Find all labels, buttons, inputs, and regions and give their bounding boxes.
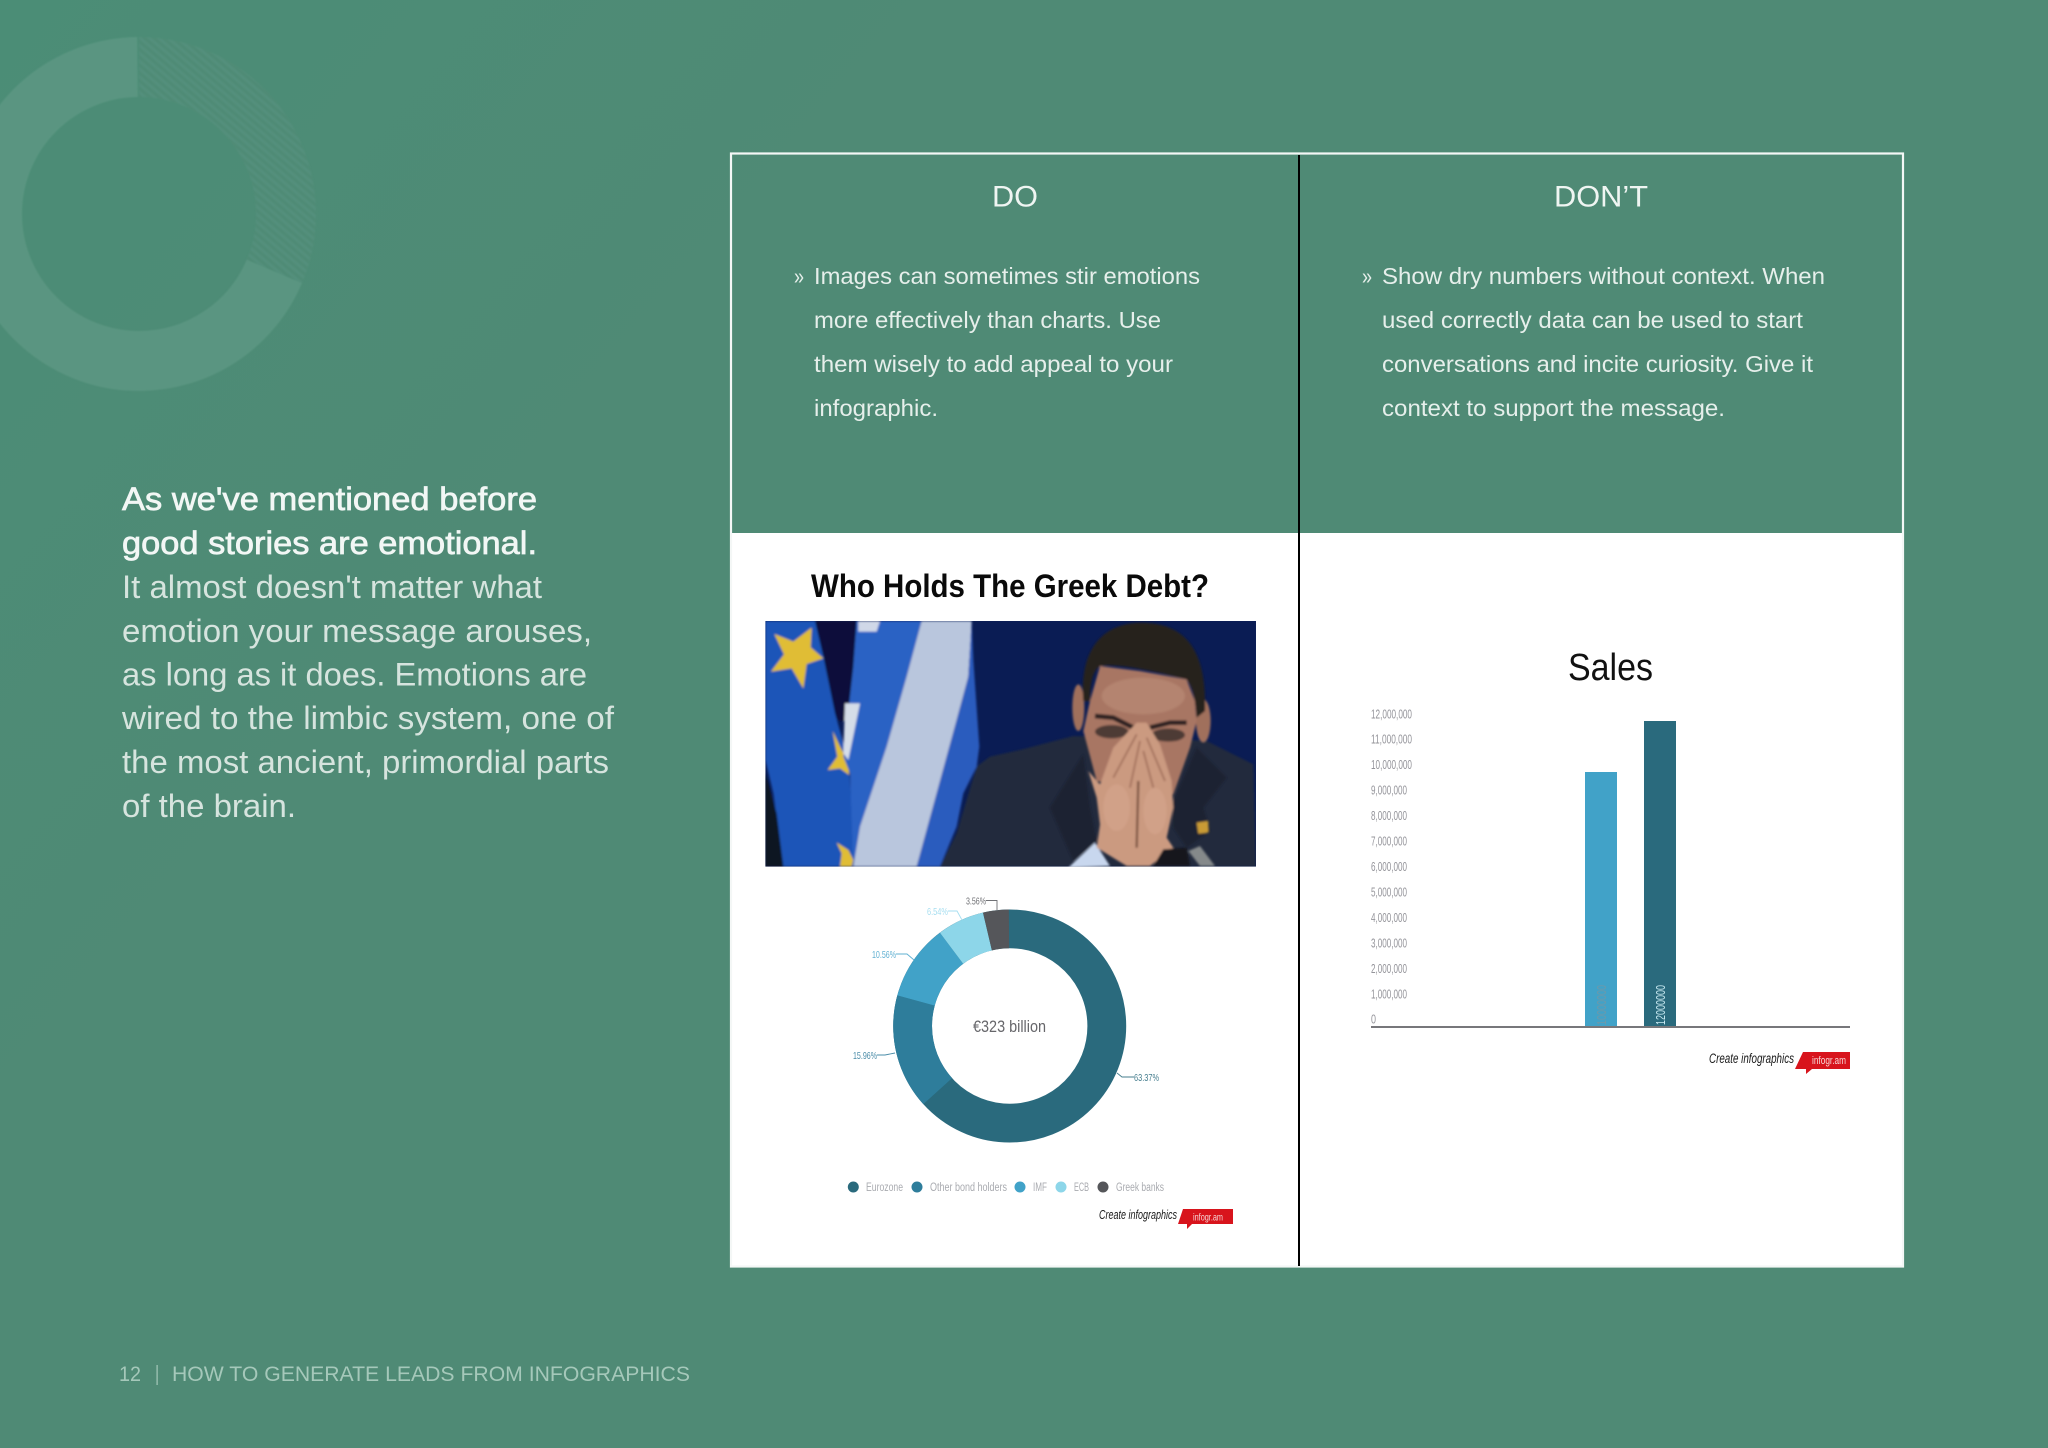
intro text block	[121, 481, 614, 824]
infogram credit, right chart: infogr.am	[1812, 1055, 1846, 1067]
y axis labels: 10,000,000	[1371, 757, 1412, 772]
infogram credit, left chart: Create infographics	[1099, 1207, 1177, 1222]
y axis labels: 7,000,000	[1371, 834, 1407, 848]
photo: politician with hands over face beside flags	[765, 621, 1256, 868]
body paragraph: It almost doesn't matter what	[122, 569, 542, 605]
donut legend: Greek banks	[1116, 1182, 1164, 1194]
DO column text	[794, 263, 1200, 421]
bar: 10000000	[1585, 772, 1617, 1027]
body paragraph: emotion your message arouses,	[122, 613, 592, 649]
donut chart: Greek debt holders	[853, 896, 1159, 1123]
table outer border	[731, 154, 1903, 1266]
bold lead-in: good stories are emotional.	[122, 525, 537, 561]
donut percentage labels and leaders: 63.37%	[1134, 1072, 1159, 1084]
y axis labels: 1,000,000	[1371, 986, 1407, 1001]
bold lead-in	[122, 481, 537, 561]
DON'T column text: Show dry numbers without context. When	[1382, 263, 1825, 289]
y axis labels: 4,000,000	[1371, 910, 1407, 925]
donut percentage labels and leaders: 15.96%	[853, 1050, 877, 1062]
DO column text: infographic.	[814, 395, 938, 421]
donut percentage labels and leaders: 3.56%	[966, 896, 986, 908]
DO column text: them wisely to add appeal to your	[814, 351, 1173, 377]
bar value: 12000000: 12000000	[1653, 985, 1668, 1025]
y axis labels	[1371, 706, 1412, 1027]
bold lead-in: As we've mentioned before	[122, 481, 537, 517]
y axis labels: 2,000,000	[1371, 961, 1407, 976]
infogram credit, left chart: infogr.am	[1193, 1212, 1223, 1224]
DO column text: Images can sometimes stir emotions	[814, 263, 1200, 289]
infogram credit, left chart	[1099, 1207, 1233, 1229]
infogram credit, right chart: Create infographics	[1709, 1051, 1794, 1066]
y axis labels: 9,000,000	[1371, 783, 1407, 798]
body paragraph: the most ancient, primordial parts	[122, 744, 609, 780]
body paragraph	[121, 569, 614, 824]
infogram credit, right chart	[1709, 1051, 1850, 1074]
decorative ring graphic	[0, 67, 286, 361]
y axis labels: 12,000,000	[1371, 706, 1412, 721]
DO column text: »	[794, 263, 804, 289]
y axis labels: 3,000,000	[1371, 935, 1407, 950]
donut percentage labels and leaders	[853, 896, 1159, 1084]
x axis	[1371, 1026, 1850, 1028]
DON'T column heading: DON’T	[1554, 180, 1648, 214]
footer: page number and document title: 12	[119, 1363, 141, 1386]
body paragraph: as long as it does. Emotions are	[122, 656, 587, 692]
donut slices	[913, 929, 1107, 1123]
DON'T column text: context to support the message.	[1382, 395, 1725, 421]
donut legend: IMF	[1033, 1182, 1047, 1194]
DON'T column text	[1362, 263, 1825, 421]
DON'T column text: »	[1362, 263, 1372, 289]
donut legend: Other bond holders	[930, 1182, 1007, 1194]
bar value: 10000000: 10000000	[1594, 985, 1609, 1025]
donut centre value: €323 billion	[973, 1017, 1046, 1036]
white lower area of comparison table	[731, 533, 1904, 1267]
y axis labels: 8,000,000	[1371, 808, 1407, 823]
DO column text: more effectively than charts. Use	[814, 307, 1161, 333]
donut legend: ECB	[1074, 1182, 1089, 1194]
donut percentage labels and leaders: 6.54%	[927, 906, 948, 918]
body paragraph: of the brain.	[122, 788, 296, 824]
bar: 12000000	[1644, 721, 1676, 1027]
y axis labels: 5,000,000	[1371, 884, 1407, 899]
DON'T column text: conversations and incite curiosity. Give it	[1382, 351, 1814, 377]
donut legend: Eurozone	[866, 1182, 903, 1194]
y axis labels: 11,000,000	[1371, 732, 1412, 747]
donut percentage labels and leaders: 10.56%	[872, 949, 896, 961]
body paragraph: wired to the limbic system, one of	[121, 700, 614, 736]
DON'T column text: used correctly data can be used to start	[1382, 307, 1804, 333]
y axis labels: 0	[1371, 1012, 1376, 1027]
bar chart title: Sales: Sales	[1568, 647, 1653, 689]
table centre divider	[1298, 155, 1300, 1266]
bar chart: Sales	[1371, 706, 1850, 1028]
chart title: Who Holds The Greek Debt: Who Holds The Greek Debt?	[811, 568, 1209, 604]
donut legend	[848, 1182, 1164, 1194]
DO column heading: DO	[992, 180, 1038, 214]
y axis labels: 6,000,000	[1371, 859, 1407, 874]
footer: page number and document title: HOW TO GENERATE LEADS FROM INFOGRAPHICS	[172, 1363, 690, 1386]
